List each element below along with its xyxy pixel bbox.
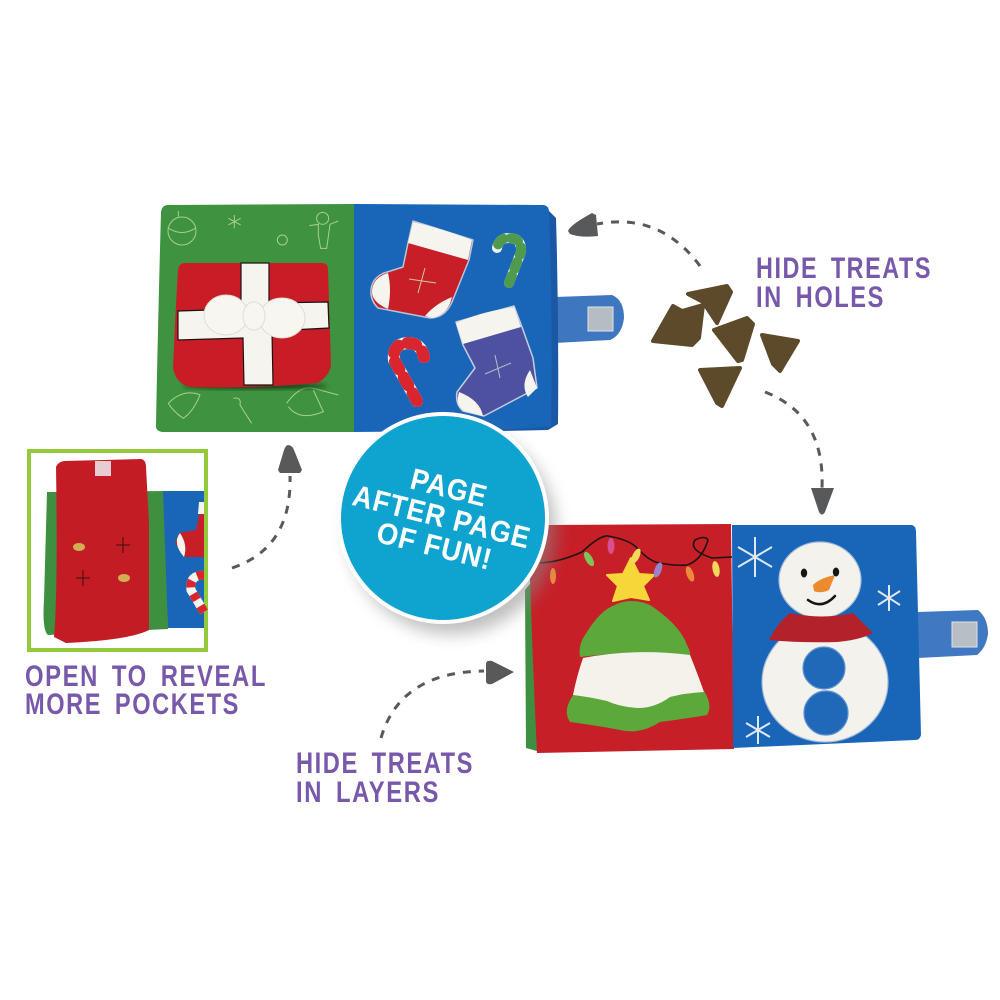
label: open to reveal: MORE POCKETS xyxy=(25,688,240,721)
tree top xyxy=(580,601,690,657)
scarf xyxy=(769,613,873,642)
candy cane fragment xyxy=(191,575,204,612)
arrow: to gift book xyxy=(232,445,302,568)
green page xyxy=(44,491,168,635)
icon: gift xyxy=(173,263,331,389)
arrow: to first book xyxy=(568,213,700,266)
treats in pockets xyxy=(73,543,130,582)
gift shadow xyxy=(183,383,327,389)
icon: tree xyxy=(567,558,709,731)
label: hide treats in layers: HIDE TREATS xyxy=(296,747,474,780)
arrow: to snowman book xyxy=(765,392,834,514)
eyes xyxy=(801,568,839,578)
back pages xyxy=(500,207,558,431)
slits xyxy=(76,537,130,586)
icon: red candy cane xyxy=(394,343,424,401)
gift box xyxy=(173,263,331,388)
circle text: AFTER PAGE xyxy=(349,479,534,555)
red open flap xyxy=(54,459,149,643)
ribbon xyxy=(178,263,329,385)
icon: snowman xyxy=(762,542,888,742)
blue disc xyxy=(341,416,545,620)
label: hide treats in holes: IN HOLES xyxy=(756,281,885,314)
tree bottom xyxy=(567,691,709,731)
blue page xyxy=(163,491,204,628)
label: open to reveal: OPEN TO REVEAL xyxy=(25,660,267,693)
callout circle xyxy=(337,412,556,634)
mouth xyxy=(808,596,835,604)
icon: purple stocking xyxy=(456,306,537,416)
circle text: OF FUN! xyxy=(373,516,496,577)
cuff xyxy=(456,307,521,344)
bow xyxy=(204,295,305,338)
string of lights xyxy=(540,536,732,584)
toe xyxy=(458,392,483,416)
doodles on green page xyxy=(168,211,338,423)
book: open to reveal xyxy=(29,451,206,650)
book: gift and stockings xyxy=(156,204,624,432)
blue page xyxy=(354,204,552,432)
green page xyxy=(156,204,354,432)
white ring xyxy=(337,412,549,624)
icon: treats xyxy=(653,286,798,406)
nose xyxy=(813,575,835,592)
velcro patch xyxy=(588,307,613,331)
slit xyxy=(485,355,511,378)
arrow: to tree book xyxy=(381,661,514,738)
circle text: PAGE xyxy=(407,463,491,514)
heel xyxy=(425,297,452,318)
icon: snowflakes xyxy=(738,537,900,744)
toe xyxy=(372,273,390,309)
cuff xyxy=(408,222,472,260)
stocking fragment xyxy=(175,502,204,557)
tab xyxy=(555,295,624,343)
tree snow xyxy=(573,652,704,708)
icon: green candy cane xyxy=(497,238,521,283)
body xyxy=(762,622,888,742)
buttons xyxy=(803,647,848,735)
head xyxy=(779,542,861,618)
slit xyxy=(409,268,436,293)
velcro patch xyxy=(952,622,977,647)
velcro xyxy=(95,461,111,476)
circle text xyxy=(342,450,541,585)
tab xyxy=(918,610,988,658)
shadow xyxy=(348,426,556,634)
icon: red stocking xyxy=(371,221,473,318)
red page xyxy=(530,524,734,753)
green edge xyxy=(525,575,537,751)
heel xyxy=(524,370,537,397)
label: hide treats in layers: IN LAYERS xyxy=(296,776,440,809)
label: hide treats in holes: HIDE TREATS xyxy=(756,252,932,285)
photo frame xyxy=(29,451,206,650)
book: tree and snowman xyxy=(525,524,988,753)
blue page xyxy=(732,525,921,748)
star xyxy=(607,558,654,601)
